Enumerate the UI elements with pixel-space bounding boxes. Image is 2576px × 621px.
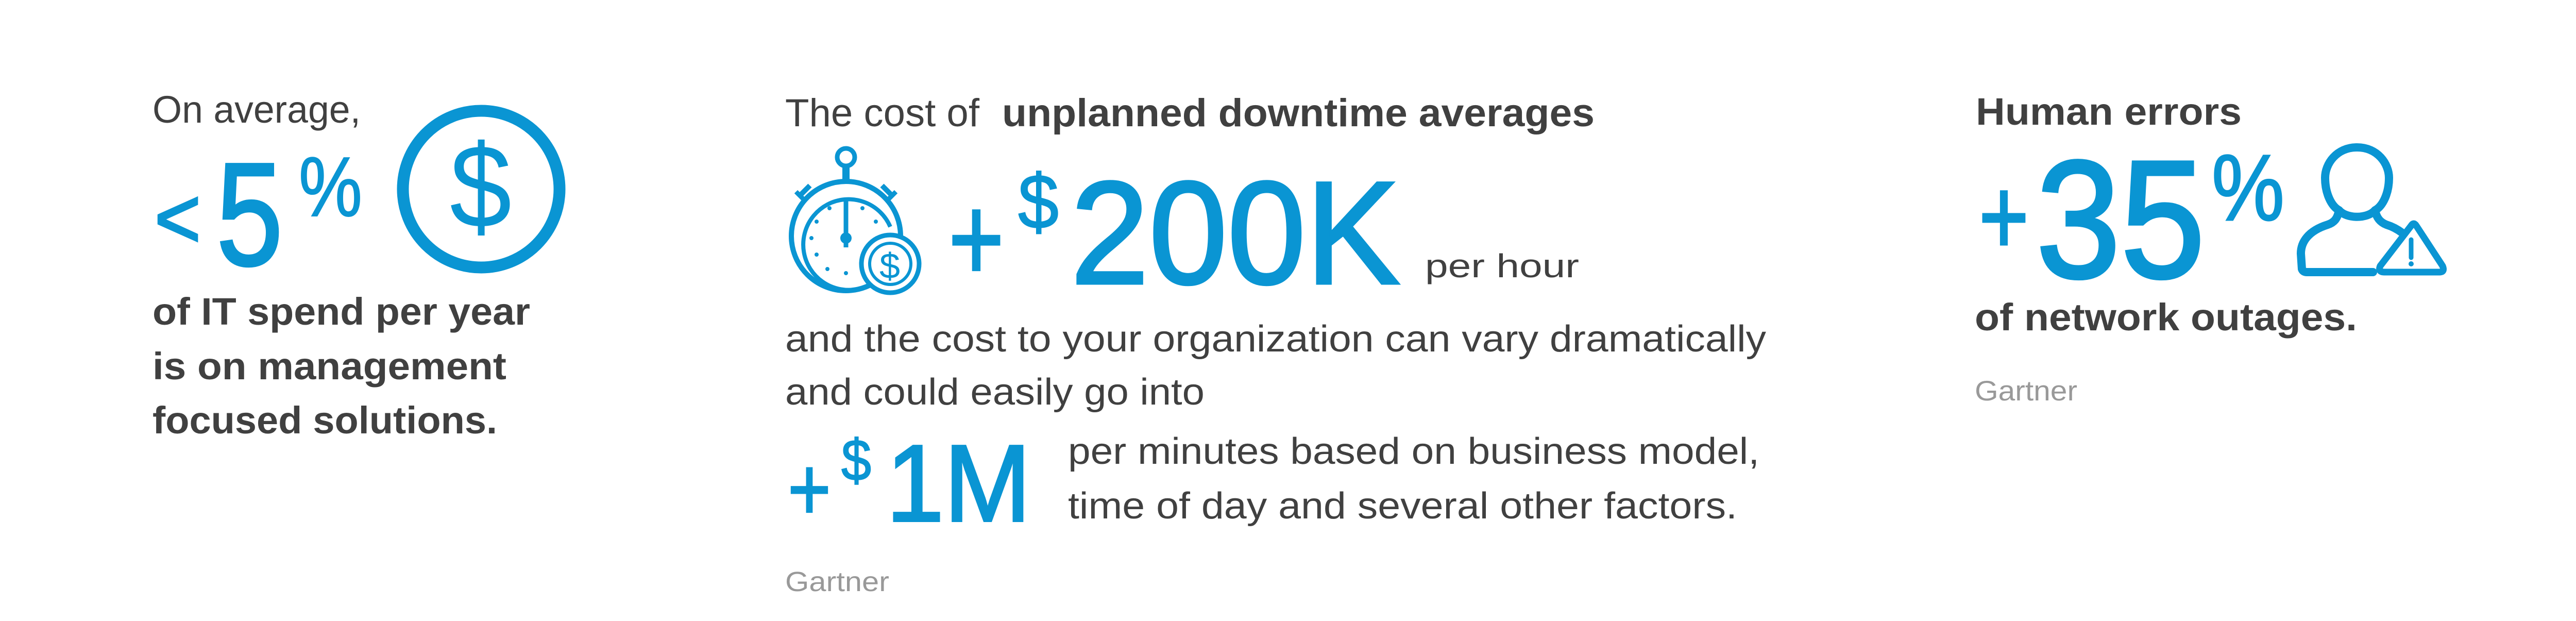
text: management spend description: of IT spend per year	[152, 290, 530, 333]
text: per minute description: per minutes based on business model,	[1068, 431, 1759, 472]
stat: 1M per minute: 1M	[886, 422, 1031, 544]
text: on average: On average,	[152, 88, 361, 131]
source: Gartner: Gartner	[1975, 375, 2077, 407]
stat: 35 percent: %	[2212, 135, 2284, 240]
stat: 1M per minute	[788, 422, 1031, 544]
stat: 200K per hour: +	[948, 171, 1004, 307]
stat: less than 5 percent: %	[299, 140, 362, 234]
stat: 35 percent	[1979, 126, 2284, 313]
icon: person with warning	[2301, 147, 2444, 272]
stat: less than 5 percent: 5	[216, 133, 283, 296]
text: per minute description	[1068, 431, 1759, 527]
text: management spend description: is on management	[152, 345, 506, 388]
stat: less than 5 percent: <	[155, 171, 201, 265]
text: cost varies: and could easily go into	[785, 372, 1205, 413]
text: management spend description: focused solutions.	[152, 399, 497, 442]
stat: 200K per hour: $	[1018, 158, 1059, 245]
heading: human errors: Human errors	[1976, 90, 2242, 133]
text: cost varies	[785, 318, 1766, 413]
heading: cost of unplanned downtime: The cost of	[785, 91, 980, 135]
heading: cost of unplanned downtime: unplanned downtime averages	[1002, 91, 1595, 135]
panel: human errors	[1975, 90, 2444, 407]
icon: dollar coin: $	[450, 120, 512, 253]
source: Gartner: Gartner	[785, 566, 889, 597]
text: of network outages: of network outages.	[1975, 296, 2357, 339]
panel: downtime cost	[785, 91, 1766, 597]
stat: less than 5 percent	[155, 133, 362, 296]
text: cost varies: and the cost to your organization can vary dramatically	[785, 318, 1766, 360]
stat: 200K per hour: 200K	[1071, 152, 1400, 315]
stat: 1M per minute: $	[841, 428, 871, 493]
stat: 35 percent: 35	[2036, 126, 2205, 313]
icon: dollar coin	[403, 111, 560, 267]
stat: 1M per minute: +	[788, 439, 831, 540]
icon: stopwatch with coin	[791, 148, 919, 293]
stat: 35 percent: +	[1979, 156, 2029, 277]
text: per minute description: time of day and several other factors.	[1068, 485, 1737, 527]
panel: IT spend	[152, 88, 560, 442]
icon: stopwatch with coin: $	[879, 246, 900, 286]
text: management spend description	[152, 290, 530, 442]
text: per hour: per hour	[1425, 247, 1579, 284]
